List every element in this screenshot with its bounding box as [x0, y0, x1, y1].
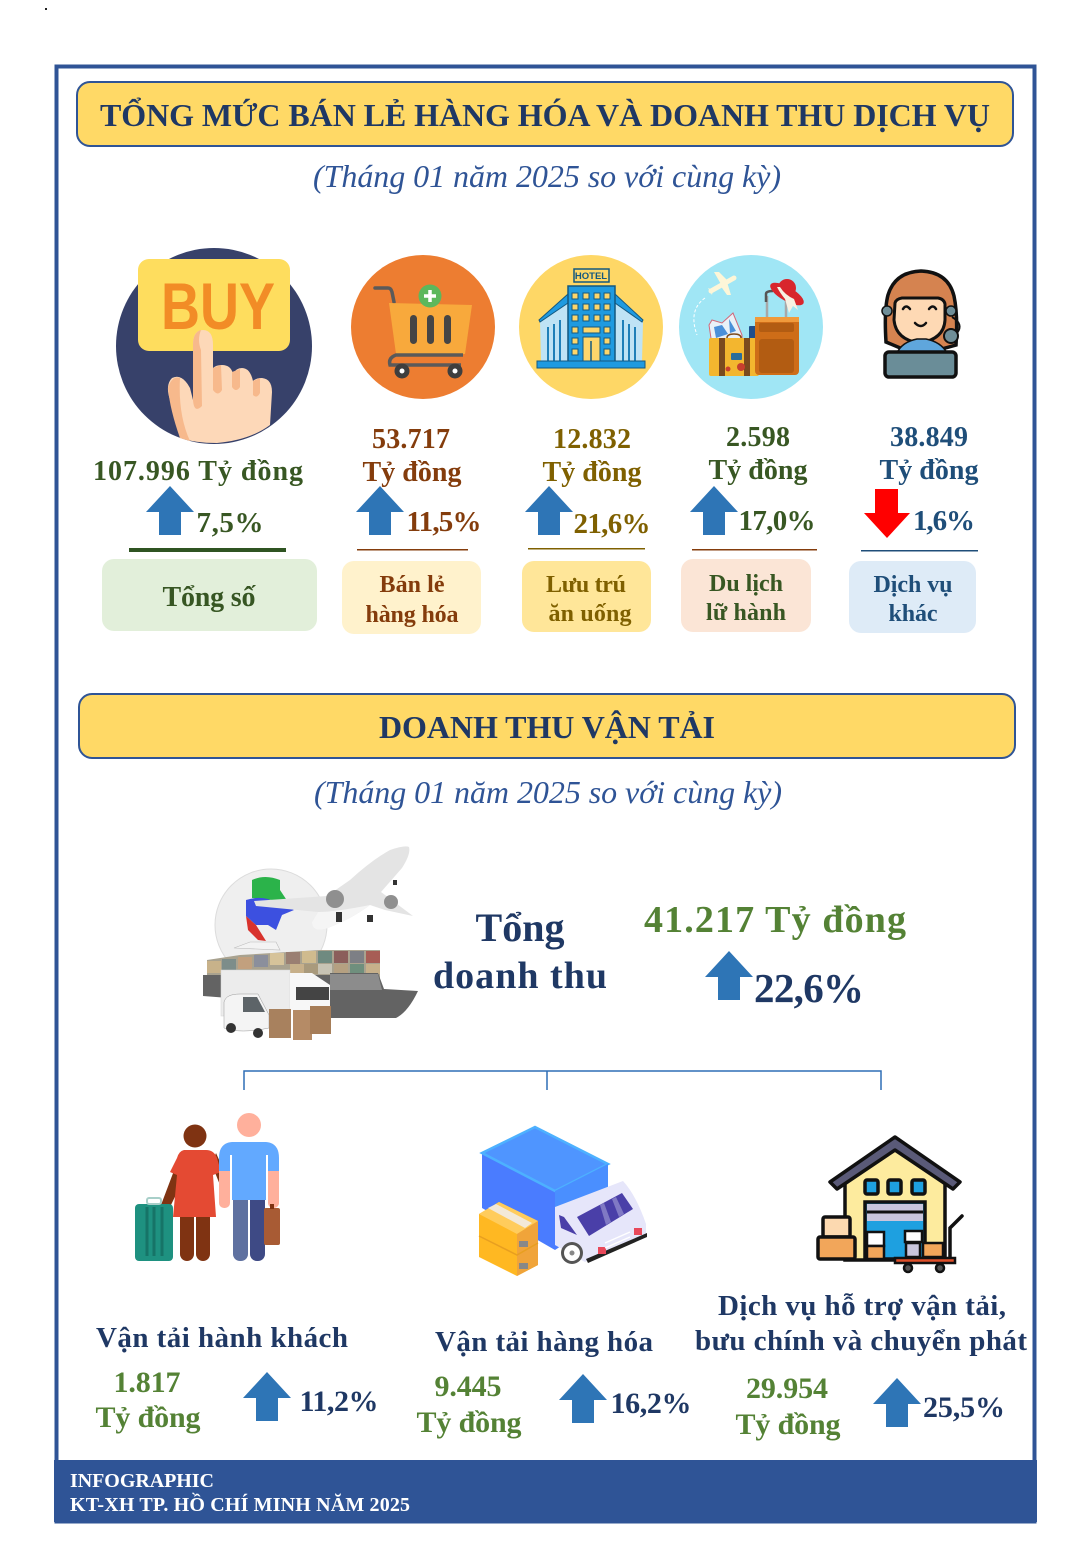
stat: retail goods: 11,5%	[406, 506, 482, 538]
footer: INFOGRAPHIC	[70, 1470, 214, 1492]
stat: passenger transport: Tỷ đồng	[96, 1401, 200, 1434]
stat: freight transport: Vận tải hàng hóa	[435, 1326, 654, 1358]
stat: travel	[681, 422, 817, 632]
subtitle: retail: (Tháng 01 năm 2025 so với cùng kỳ)	[313, 158, 781, 194]
icon: warehouse	[818, 1137, 962, 1272]
stat: travel: Du lịch	[709, 571, 783, 597]
icon: travel luggage	[679, 255, 823, 399]
stat: total retail	[93, 456, 317, 631]
stat: transport support services: 29.954	[746, 1372, 828, 1405]
heading: transport: DOANH THU VẬN TẢI	[379, 709, 715, 745]
stat: transport support services: Tỷ đồng	[736, 1408, 840, 1441]
stat: other services: 1,6%	[913, 505, 975, 537]
subtitle: transport: (Tháng 01 năm 2025 so với cùng kỳ)	[314, 774, 782, 810]
footer: KT-XH TP. HỒ CHÍ MINH NĂM 2025	[70, 1492, 410, 1516]
stat: passenger transport: 11,2%	[300, 1385, 378, 1418]
icon: buy button: BUY	[161, 269, 275, 343]
stat: travel: lữ hành	[706, 600, 786, 626]
stat: total retail: Tổng số	[162, 582, 256, 613]
total transport revenue: doanh thu	[433, 955, 607, 997]
stat: total retail: 7,5%	[196, 507, 264, 539]
stat: other services: 38.849	[890, 422, 968, 453]
icon: shopping cart	[351, 255, 495, 399]
stat: accommodation and food: 12.832	[553, 424, 631, 455]
stat: accommodation and food: Lưu trú	[546, 572, 626, 598]
stat: other services: Dịch vụ	[874, 572, 952, 598]
stat: accommodation and food: ăn uống	[548, 601, 632, 627]
stat: freight transport: 9.445	[434, 1370, 502, 1403]
icon: customer service agent	[882, 271, 960, 377]
stat: passenger transport: 1.817	[114, 1366, 180, 1399]
stat: transport support services: bưu chính và chuyển phát	[695, 1325, 1027, 1357]
stat: freight transport: 16,2%	[610, 1387, 692, 1420]
stat: retail goods: Tỷ đồng	[362, 457, 462, 488]
icon: hotel	[519, 255, 663, 399]
stat: travel: Tỷ đồng	[708, 455, 808, 486]
total transport revenue: 22,6%	[754, 965, 864, 1011]
stat: total retail: 107.996 Tỷ đồng	[93, 456, 303, 487]
stat: transport support services	[695, 1290, 1027, 1441]
icon: delivery truck	[479, 1127, 647, 1276]
icon: hotel: HOTEL	[575, 271, 607, 282]
heading: retail	[77, 82, 1013, 146]
stat: freight transport: Tỷ đồng	[416, 1406, 522, 1439]
stat: passenger transport: Vận tải hành khách	[96, 1322, 348, 1354]
stat: accommodation and food: Tỷ đồng	[542, 457, 642, 488]
total transport revenue: Tổng	[476, 905, 564, 950]
stat: travel: 17,0%	[738, 505, 816, 537]
heading: retail: TỔNG MỨC BÁN LẺ HÀNG HÓA VÀ DOANH THU DỊCH VỤ	[100, 97, 990, 133]
stat: other services: khác	[888, 601, 938, 627]
stat: passenger transport	[96, 1322, 378, 1434]
stat: transport support services: 25,5%	[923, 1391, 1005, 1424]
connector lines	[244, 1071, 881, 1090]
total transport revenue	[433, 899, 906, 1011]
stat: accommodation and food	[522, 424, 651, 632]
footer	[54, 1460, 1037, 1522]
stat: accommodation and food: 21,6%	[574, 508, 650, 540]
stat: freight transport	[416, 1326, 692, 1439]
stat: retail goods: 53.717	[372, 424, 450, 455]
total transport revenue: 41.217 Tỷ đồng	[644, 899, 906, 941]
stat: retail goods	[342, 424, 482, 634]
icon: buy button	[116, 248, 312, 444]
stat: travel: 2.598	[726, 422, 790, 453]
heading: transport	[79, 694, 1015, 758]
image: plane, ship and truck	[203, 846, 418, 1040]
stat: retail goods: hàng hóa	[366, 602, 458, 628]
stat: other services: Tỷ đồng	[880, 455, 978, 486]
stat: transport support services: Dịch vụ hỗ trợ vận tải,	[718, 1290, 1006, 1322]
stat: other services	[849, 422, 978, 633]
icon: passengers	[135, 1113, 280, 1261]
stat: retail goods: Bán lẻ	[380, 572, 445, 598]
